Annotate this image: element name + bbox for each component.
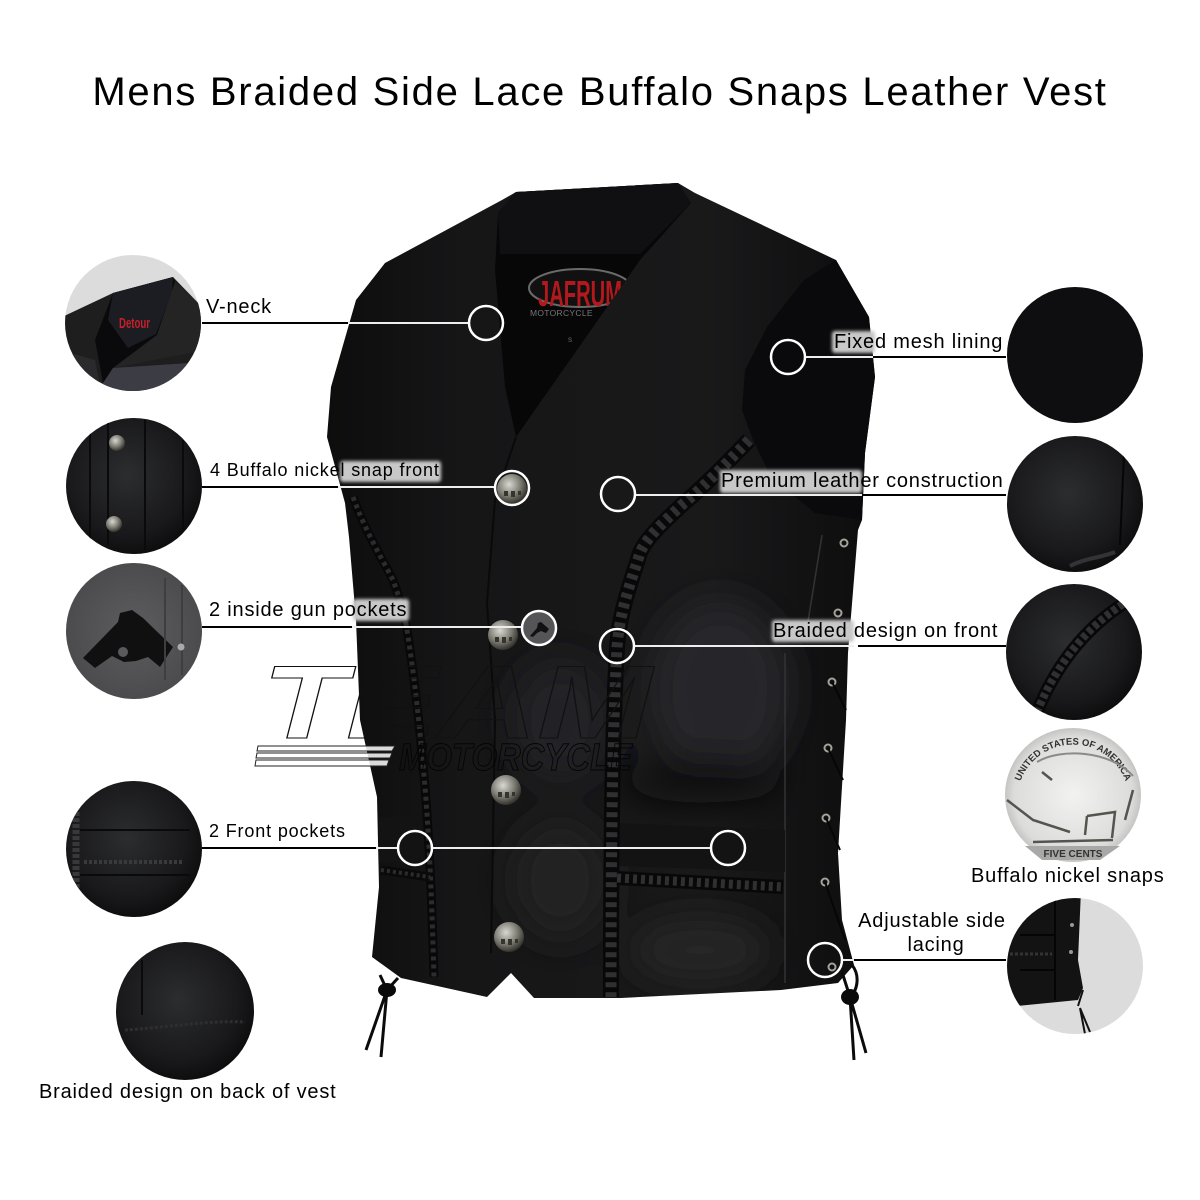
- thumbnail: v-neck: Detour: [119, 315, 150, 332]
- thumbnail: back braid: [116, 942, 254, 1080]
- label: side lacing: lacing: [907, 934, 965, 956]
- side lacing eyelets: [822, 540, 848, 970]
- logo label: S: [568, 338, 572, 344]
- logo label: [529, 269, 631, 344]
- label: v-neck: V-neck: [206, 296, 272, 318]
- label: snap front: 4 Buffalo nickel snap front: [210, 460, 440, 480]
- icon: pistol: [83, 610, 173, 668]
- vest photo: [255, 183, 875, 1060]
- pocket shapes: [379, 817, 785, 872]
- inner neck lining: [495, 183, 691, 437]
- braid front right: [611, 440, 749, 997]
- braid front left: [353, 497, 434, 977]
- label: side lacing: Adjustable side: [858, 910, 1006, 932]
- pocket braid left: [381, 870, 430, 877]
- armhole lining: [742, 260, 875, 520]
- label: braided front: Braided design on front: [773, 620, 998, 642]
- label halos: [340, 331, 875, 642]
- title: Mens Braided Side Lace Buffalo Snaps Leather Vest: [92, 70, 1108, 114]
- white leader lines on vest: [338, 323, 873, 960]
- logo label: JAFRUM: [538, 273, 622, 314]
- logo label: MOTORCYCLE: [530, 308, 593, 318]
- label: mesh lining: Fixed mesh lining: [834, 331, 1003, 353]
- leather highlights: [510, 600, 790, 980]
- label: front pockets: 2 Front pockets: [209, 821, 346, 841]
- watermark: MOTORCYCLE: [399, 737, 633, 779]
- thumbnail: premium leather: [1007, 436, 1143, 572]
- right lace: [841, 965, 866, 1060]
- side lace strands: [825, 682, 846, 940]
- thumbnail: v-neck: [65, 255, 201, 391]
- callout circles on vest: [398, 306, 842, 977]
- label: buffalo snaps: Buffalo nickel snaps: [971, 865, 1165, 887]
- vest body: [327, 183, 875, 998]
- buffalo snaps: [488, 474, 527, 952]
- watermark: [255, 645, 655, 779]
- thumbnail: mesh lining: [1007, 287, 1143, 423]
- left lace: [366, 975, 398, 1057]
- mini gun pocket inset: [522, 611, 556, 645]
- labels right: [721, 331, 1165, 956]
- thumbnail: snap front: [66, 418, 202, 554]
- thumbnail: front pockets: [66, 781, 202, 917]
- label: braided back: Braided design on back of vest: [39, 1081, 337, 1103]
- placket seam: [487, 437, 516, 953]
- labels left: [39, 296, 440, 1103]
- thumbnail: buffalo nickel coin: UNITED STATES OF AMERICA: [1014, 738, 1131, 782]
- label: side lacing: [858, 910, 1006, 956]
- thumbnail: buffalo nickel coin: FIVE CENTS: [1044, 849, 1103, 860]
- thumbnail: gun pocket: [66, 563, 202, 699]
- thumbnail: side lacing: [1007, 898, 1143, 1034]
- side seam: [785, 535, 822, 983]
- label: premium leather: Premium leather construction: [721, 470, 1004, 492]
- thumbnail: buffalo nickel coin: [1005, 728, 1141, 862]
- thumbnail: braided front: [1006, 584, 1142, 720]
- pocket braid right: [617, 878, 783, 887]
- neck upper shading: [498, 183, 691, 254]
- watermark: TEAM: [262, 645, 655, 761]
- leader lines: [202, 323, 1006, 960]
- label: gun pockets: 2 inside gun pockets: [209, 599, 407, 621]
